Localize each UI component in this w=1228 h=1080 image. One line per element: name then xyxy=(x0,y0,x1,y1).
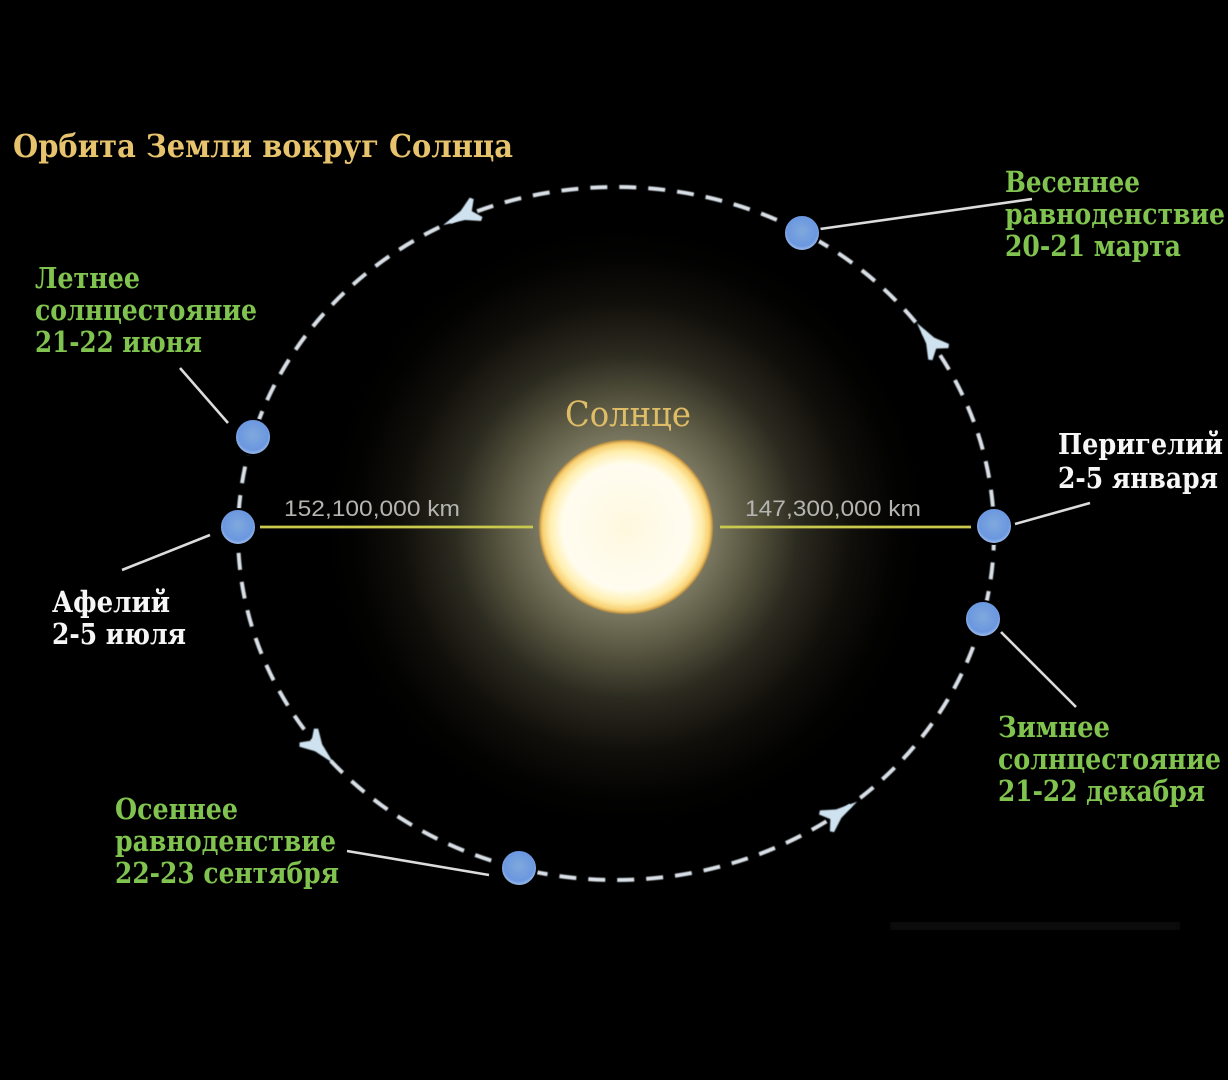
orbit dashed ellipse xyxy=(238,187,994,880)
label: autumn equinox: Осеннее xyxy=(115,792,238,826)
planets xyxy=(220,215,1012,886)
planet: winter solstice xyxy=(965,601,1001,637)
planet: summer solstice xyxy=(235,419,271,455)
label: summer solstice: Летнее xyxy=(35,261,140,295)
label: aphelion xyxy=(52,585,186,651)
arrow: lower right xyxy=(817,791,864,834)
faint smudge xyxy=(890,922,1180,930)
label: perihelion xyxy=(1058,427,1223,495)
label: aphelion: Афелий xyxy=(52,585,170,619)
sun xyxy=(539,440,713,614)
distance label: aphelion: 152,100,000 km xyxy=(284,496,460,521)
leader lines xyxy=(122,199,1090,875)
sun glow xyxy=(326,227,926,827)
planet: aphelion xyxy=(220,509,256,545)
arrow: right xyxy=(907,315,951,362)
label: winter solstice xyxy=(998,710,1221,808)
direction arrows xyxy=(297,196,951,834)
label: winter solstice: Зимнее xyxy=(998,710,1110,744)
label: spring equinox xyxy=(1005,165,1225,263)
planet: autumn equinox xyxy=(501,850,537,886)
planet: spring equinox xyxy=(784,215,820,251)
label: summer solstice: солнцестояние xyxy=(35,293,257,327)
label: spring equinox: Весеннее xyxy=(1005,165,1140,199)
label: spring equinox: 20-21 марта xyxy=(1005,229,1181,263)
title: Орбита Земли вокруг Солнца xyxy=(13,127,513,165)
distance lines xyxy=(260,526,971,528)
arrow: top xyxy=(437,196,484,237)
distance label: perihelion: 147,300,000 km xyxy=(745,496,921,521)
label: summer solstice xyxy=(35,261,257,359)
sun label: Солнце xyxy=(565,395,691,435)
label: summer solstice: 21-22 июня xyxy=(35,325,202,359)
label: aphelion: 2-5 июля xyxy=(52,617,186,651)
label: autumn equinox xyxy=(115,792,339,890)
planet: perihelion xyxy=(976,508,1012,544)
label: autumn equinox: равноденствие xyxy=(115,824,336,858)
label: autumn equinox: 22-23 сентября xyxy=(115,856,339,890)
arrow: lower left xyxy=(297,726,343,773)
